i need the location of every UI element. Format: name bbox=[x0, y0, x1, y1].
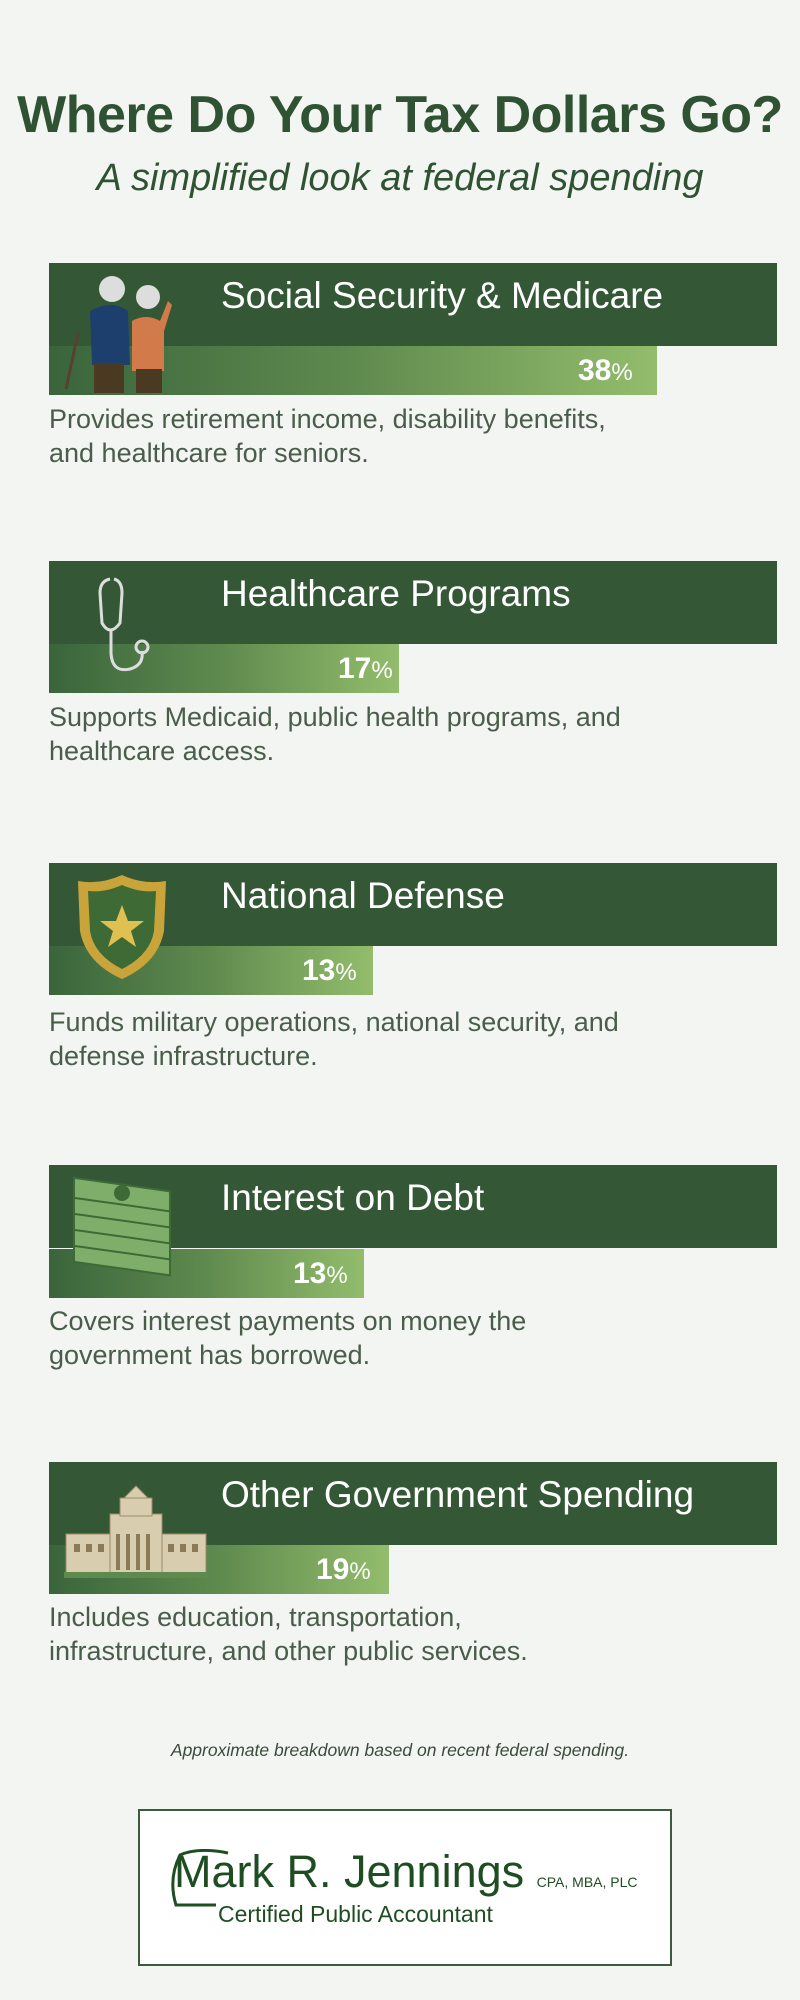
description: defense bbox=[49, 1007, 619, 1071]
icon: capitol building bbox=[64, 1485, 206, 1578]
percentage 38: 38% bbox=[578, 354, 633, 387]
icon: shield bbox=[78, 875, 166, 979]
heading: healthcare: Healthcare Programs bbox=[221, 573, 571, 614]
description: healthcare: Supports Medicaid, public health programs, and bbox=[49, 702, 621, 732]
icon: cash stack bbox=[73, 1177, 171, 1276]
heading: interest: Interest on Debt bbox=[221, 1177, 484, 1218]
description: defense: defense infrastructure. bbox=[49, 1041, 318, 1071]
percentage 13: 13% bbox=[293, 1257, 348, 1290]
panel: other spending bbox=[49, 1462, 777, 1594]
panel: defense bbox=[49, 863, 777, 995]
description: interest: government has borrowed. bbox=[49, 1340, 370, 1370]
percentage 17: 17% bbox=[338, 652, 393, 685]
description: defense: Funds military operations, national security, and bbox=[49, 1007, 619, 1037]
panel: healthcare bbox=[49, 561, 777, 693]
heading: defense: National Defense bbox=[221, 875, 505, 916]
description: other: infrastructure, and other public services. bbox=[49, 1636, 528, 1666]
logo mark bbox=[171, 1849, 228, 1906]
title: Where Do Your Tax Dollars Go? bbox=[17, 86, 783, 144]
description: social security bbox=[49, 404, 606, 468]
description: interest: Covers interest payments on money the bbox=[49, 1306, 526, 1336]
panel: social security bbox=[49, 263, 777, 395]
description: social security: Provides retirement income, disability benefits, bbox=[49, 404, 606, 434]
description: other: Includes education, transportation, bbox=[49, 1602, 462, 1632]
description: social security: and healthcare for seniors. bbox=[49, 438, 369, 468]
heading: social security: Social Security & Medicare bbox=[221, 275, 663, 316]
heading: other: Other Government Spending bbox=[221, 1474, 694, 1515]
subtitle: A simplified look at federal spending bbox=[97, 157, 703, 199]
description: interest bbox=[49, 1306, 526, 1370]
percentage 13: 13% bbox=[302, 954, 357, 987]
logo subtitle: Certified Public Accountant bbox=[218, 1901, 493, 1927]
logo box bbox=[138, 1809, 672, 1966]
logo name: Mark R. Jennings CPA, MBA, PLC bbox=[174, 1846, 638, 1897]
percentage 19: 19% bbox=[316, 1553, 371, 1586]
icon: stethoscope bbox=[98, 578, 150, 672]
description: other bbox=[49, 1602, 528, 1666]
panel: interest on debt bbox=[49, 1165, 777, 1298]
footnote: Approximate breakdown based on recent federal spending. bbox=[171, 1740, 629, 1760]
description: healthcare: healthcare access. bbox=[49, 736, 274, 766]
icon: elderly couple bbox=[64, 276, 172, 393]
description: healthcare bbox=[49, 702, 621, 766]
